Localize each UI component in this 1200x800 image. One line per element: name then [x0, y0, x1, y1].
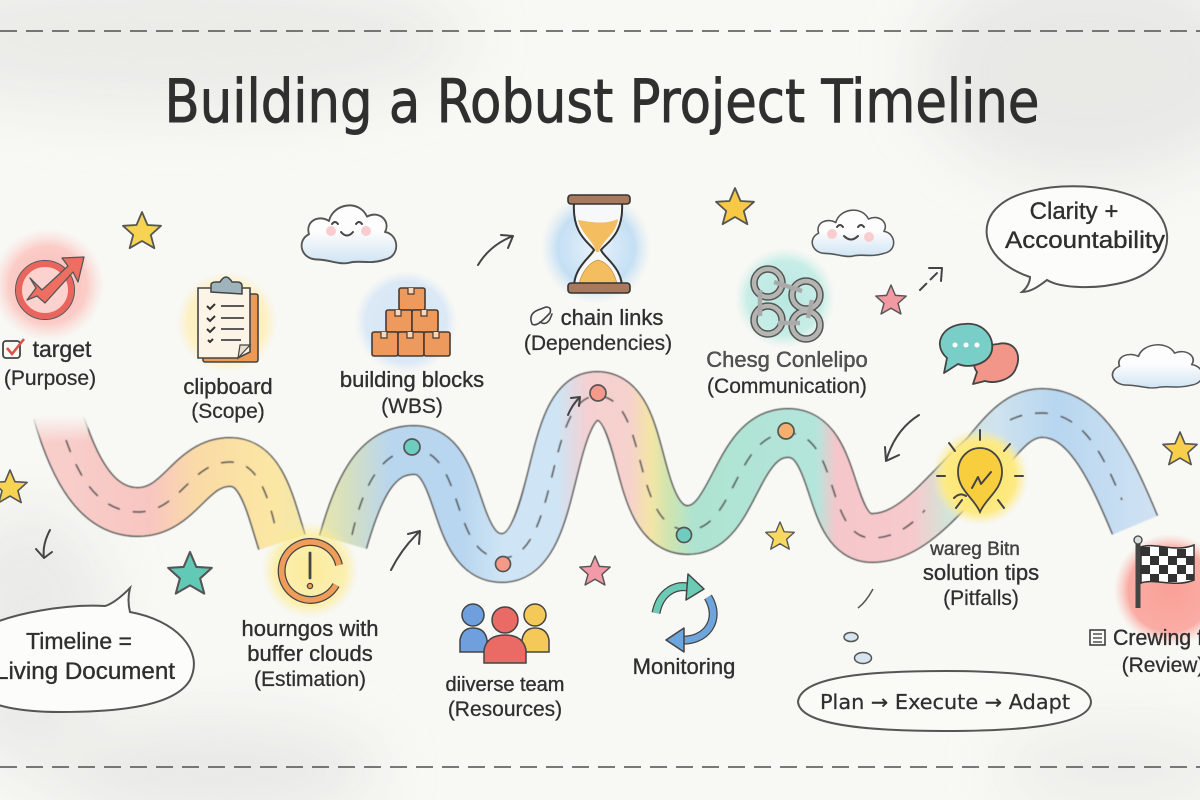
cloud with face, left [302, 205, 396, 263]
label: monitoring: Monitoring [633, 654, 735, 679]
speech bubble: timeline living document [0, 588, 194, 712]
plain cloud, far right [1112, 345, 1200, 388]
label: communication: Chesg Conlelipo [706, 347, 868, 372]
label: building blocks: (WBS) [381, 395, 443, 418]
icon: chain links [735, 248, 835, 348]
label: building blocks: building blocks [340, 367, 484, 392]
label: chain links [524, 305, 672, 355]
label: estimation: (Estimation) [254, 668, 366, 691]
label: review [1090, 625, 1200, 677]
icon: warning timer [262, 522, 358, 618]
label: estimation [242, 616, 378, 691]
label: clipboard: clipboard [183, 374, 273, 399]
speech bubble: timeline living document: Living Document [0, 658, 175, 685]
speech bubble: clarity + accountability [987, 186, 1167, 292]
label: resources [446, 674, 564, 721]
icon: light bulb [932, 429, 1028, 525]
speech bubble: timeline living document: Timeline = [26, 628, 132, 654]
pill: plan execute adapt: Plan → Execute → Adapt [820, 690, 1070, 714]
label: clipboard [183, 374, 273, 423]
stars [0, 188, 1197, 594]
pill: plan execute adapt [798, 671, 1091, 731]
winding road timeline [26, 396, 1135, 558]
label: estimation: hourngos with [242, 616, 378, 641]
icon: hourglass [541, 193, 651, 303]
speech bubble: clarity + accountability: Clarity + [1030, 198, 1118, 225]
icon: building blocks [355, 271, 457, 373]
icon: chat bubbles [940, 324, 1018, 384]
label: target [3, 336, 96, 390]
cloud with face, right [812, 210, 894, 256]
arrows [36, 235, 942, 570]
icon: monitoring cycle [656, 574, 713, 652]
label: resources: (Resources) [448, 698, 562, 721]
icon: clipboard [177, 272, 277, 372]
icon: target [0, 229, 104, 341]
icon: checkered flag [1114, 534, 1200, 646]
icon: diverse team [460, 604, 549, 663]
label: pitfalls: (Pitfalls) [943, 587, 1019, 610]
label: chain links: (Dependencies) [524, 332, 672, 355]
label: pitfalls [923, 539, 1039, 610]
label: pitfalls: solution tips [923, 560, 1039, 585]
label: target: (Purpose) [4, 367, 96, 390]
label: estimation: buffer clouds [247, 641, 373, 666]
label: target: target [33, 336, 92, 362]
label: building blocks [340, 367, 484, 418]
road milestone dots [404, 385, 794, 572]
label: chain links: chain links [561, 305, 663, 330]
label: resources: diiverse team [446, 674, 564, 696]
label: pitfalls: wareg Bitn [929, 539, 1020, 560]
speech bubble: clarity + accountability: Accountability [1005, 227, 1165, 254]
title: Building a Robust Project Timeline [164, 67, 1040, 137]
thought bubbles [844, 589, 873, 664]
label: communication [706, 347, 868, 398]
label: clipboard: (Scope) [191, 400, 265, 423]
label: communication: (Communication) [707, 375, 867, 398]
